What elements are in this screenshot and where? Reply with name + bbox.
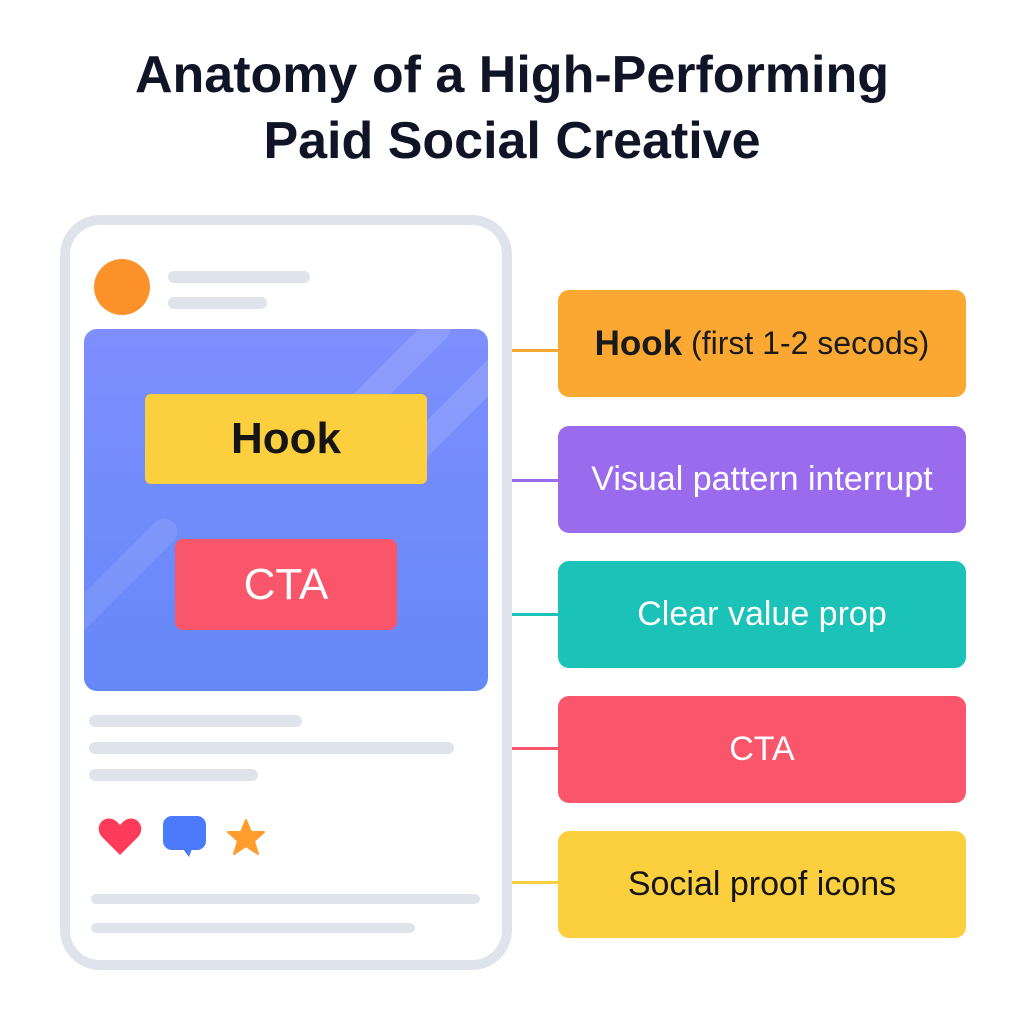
avatar [94,259,150,315]
label: CTA [558,696,966,803]
label: hook: (first 1-2 secods) [691,325,929,361]
hook box: Hook [231,414,341,463]
CTA box: CTA [244,560,328,608]
label: social proof icons: Social proof icons [628,865,896,903]
title: Anatomy of a High-Performing [135,46,889,104]
title: Paid Social Creative [263,112,761,170]
phone mockup [60,215,512,970]
label: social proof icons [558,831,966,938]
hook box [145,394,427,484]
label: clear value prop: Clear value prop [637,595,887,633]
label: clear value prop [558,561,966,668]
title [135,46,889,170]
label: hook: Hook [595,324,682,362]
CTA box [175,539,397,630]
label: CTA: CTA [729,730,795,768]
connectors [512,349,558,352]
label: visual pattern interrupt [558,426,966,533]
social icons [98,816,265,857]
creative image panel [84,329,488,691]
label: hook [558,290,966,397]
label: visual pattern interrupt: Visual pattern interrupt [591,460,933,498]
